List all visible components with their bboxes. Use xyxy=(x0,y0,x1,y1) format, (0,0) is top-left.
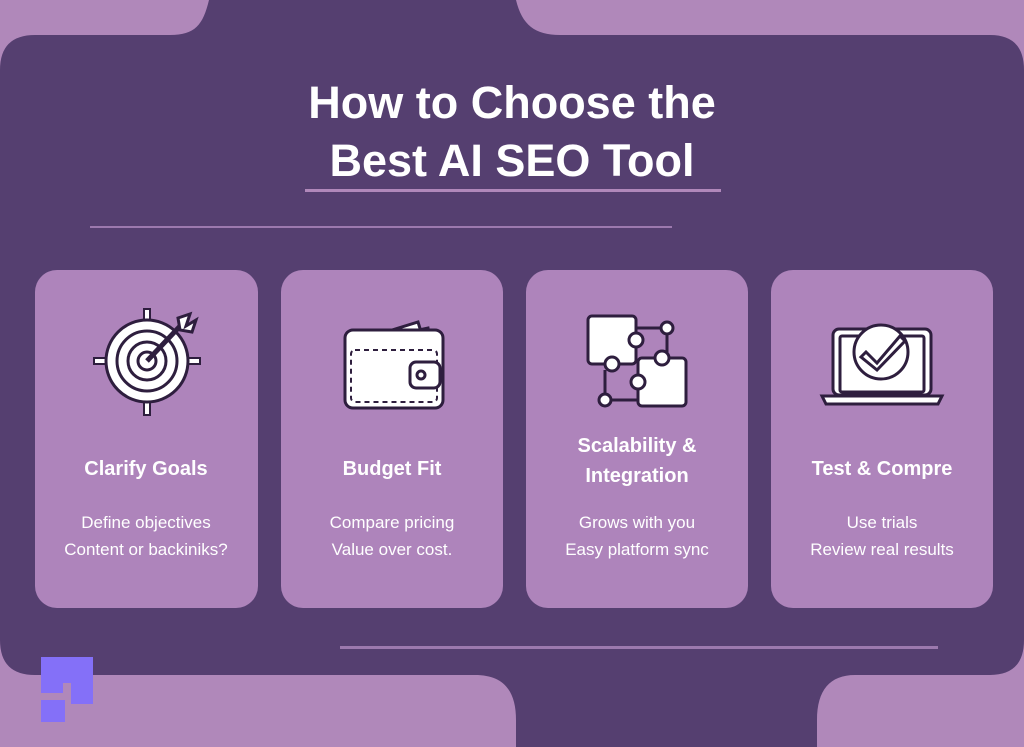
icon: laptop check xyxy=(822,325,942,404)
card 2: Budget Fit xyxy=(281,270,503,608)
title xyxy=(308,77,716,186)
description: Grows with you xyxy=(579,513,695,532)
card 4: Test & Compare xyxy=(771,270,993,608)
heading: Clarify Goals xyxy=(84,458,208,480)
heading xyxy=(578,435,696,487)
description: Define objectives xyxy=(81,513,211,532)
description: Use trials xyxy=(847,513,917,532)
heading: Integration xyxy=(585,465,689,487)
description xyxy=(64,513,228,559)
heading: Budget Fit xyxy=(343,458,442,480)
icon: target xyxy=(93,308,201,416)
heading: Test & Compre xyxy=(812,458,952,480)
title: Best AI SEO Tool xyxy=(329,135,695,186)
logo xyxy=(41,657,93,722)
title: How to Choose the xyxy=(308,77,716,128)
description xyxy=(810,513,954,559)
description: Compare pricing xyxy=(330,513,454,532)
description xyxy=(330,513,454,559)
icon: wallet xyxy=(345,322,443,408)
description: Value over cost. xyxy=(332,540,452,559)
card 3: Scalability xyxy=(526,270,748,608)
description: Content or backiniks? xyxy=(64,540,228,559)
heading: Scalability & xyxy=(578,435,696,457)
description: Review real results xyxy=(810,540,954,559)
description xyxy=(565,513,709,559)
title underline xyxy=(305,189,721,192)
card 1: Clarify Goals xyxy=(35,270,258,608)
icon: puzzle xyxy=(588,316,686,406)
description: Easy platform sync xyxy=(565,540,709,559)
